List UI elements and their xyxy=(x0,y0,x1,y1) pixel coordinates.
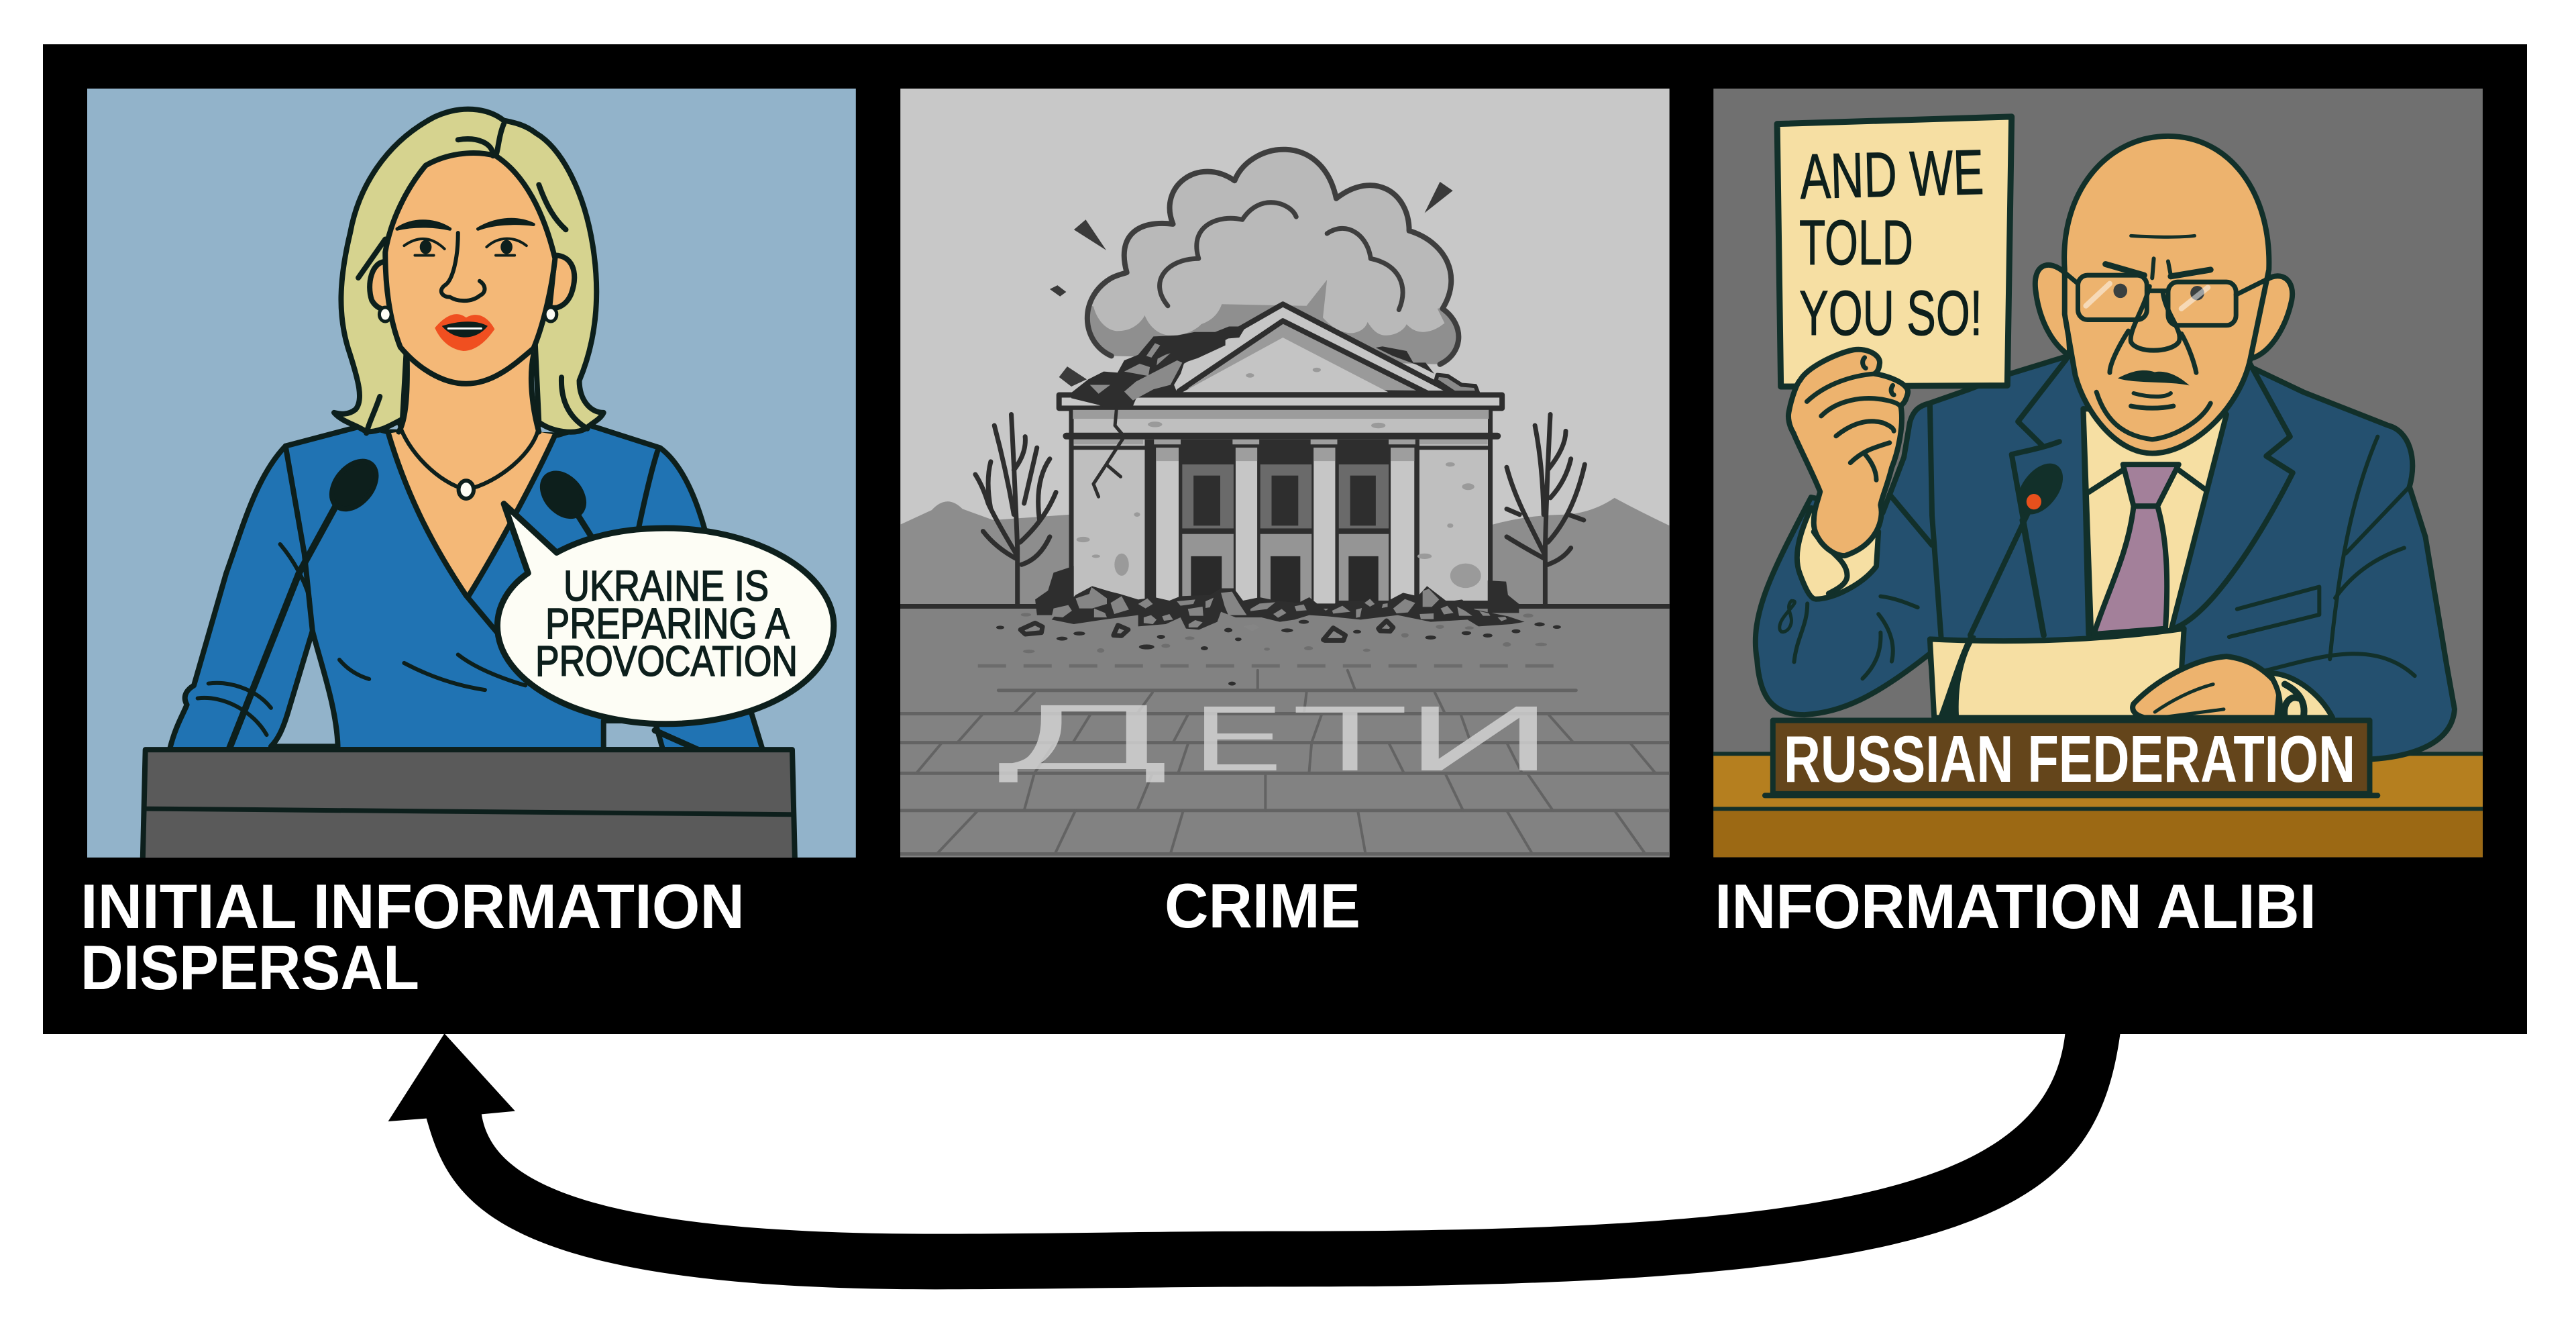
suit xyxy=(1756,356,2455,760)
caption: initial information dispersal: INITIAL INFORMATION xyxy=(80,871,745,942)
microphone left xyxy=(229,452,384,750)
caption: information alibi: INFORMATION ALIBI xyxy=(1715,871,2316,942)
panel: crime xyxy=(900,89,1670,941)
shirt xyxy=(2083,409,2226,634)
arrow: feedback loop from alibi back to dispersal xyxy=(388,1033,2121,1289)
caption: initial information dispersal: DISPERSAL xyxy=(80,932,419,1003)
cuff button xyxy=(1780,601,1794,632)
lapels and suit folds xyxy=(1890,359,2293,637)
left tree xyxy=(975,414,1056,606)
placard text xyxy=(1799,137,1984,349)
illustration: bombed theatre xyxy=(900,89,1670,857)
pavement xyxy=(900,666,1670,854)
wall crack xyxy=(1093,409,1124,497)
head xyxy=(2064,136,2269,453)
chalk word on pavement: Д xyxy=(983,691,1181,788)
speech bubble text: PREPARING A xyxy=(545,599,790,648)
raised hand xyxy=(1788,350,1908,556)
microphone xyxy=(1940,458,2068,716)
placard text: TOLD xyxy=(1799,207,1913,278)
speech bubble shape xyxy=(497,504,834,724)
caption: crime: CRIME xyxy=(1165,870,1360,941)
speech bubble text: PROVOCATION xyxy=(535,637,798,685)
chalk word on pavement: Е xyxy=(1187,692,1288,789)
podium xyxy=(143,750,795,862)
placard text: YOU SO! xyxy=(1799,278,1982,349)
desk xyxy=(1713,754,2483,857)
tie xyxy=(2094,464,2179,634)
black frame xyxy=(43,44,2527,1034)
chalk word on pavement: Т xyxy=(1295,692,1405,789)
right tree xyxy=(1507,414,1585,606)
nameplate xyxy=(1765,720,2377,795)
illustration: diplomat at table xyxy=(1713,89,2483,857)
chalk word on pavement xyxy=(999,705,1537,782)
face details xyxy=(2065,236,2266,440)
nameplate text: RUSSIAN FEDERATION xyxy=(1784,722,2355,796)
ears xyxy=(2035,265,2292,359)
rubble pile xyxy=(996,566,1561,686)
placard text: AND WE xyxy=(1799,137,1984,213)
building xyxy=(1059,304,1502,603)
smoke cloud xyxy=(1083,150,1470,375)
illustration: spokeswoman at podium xyxy=(87,89,856,862)
paper xyxy=(1930,629,2184,717)
speech bubble text: UKRAINE IS xyxy=(564,562,769,610)
placard xyxy=(1777,117,2012,387)
raised cuff xyxy=(1797,508,1878,599)
chalk word on pavement: И xyxy=(1399,692,1560,789)
panel: information alibi xyxy=(1713,89,2483,942)
microphone right xyxy=(536,464,698,750)
lower hand xyxy=(2133,656,2279,717)
panel: initial information dispersal xyxy=(80,89,856,1003)
speech bubble text xyxy=(538,570,796,676)
collapsed roof rubble xyxy=(1071,326,1478,409)
flying debris xyxy=(1050,182,1453,387)
